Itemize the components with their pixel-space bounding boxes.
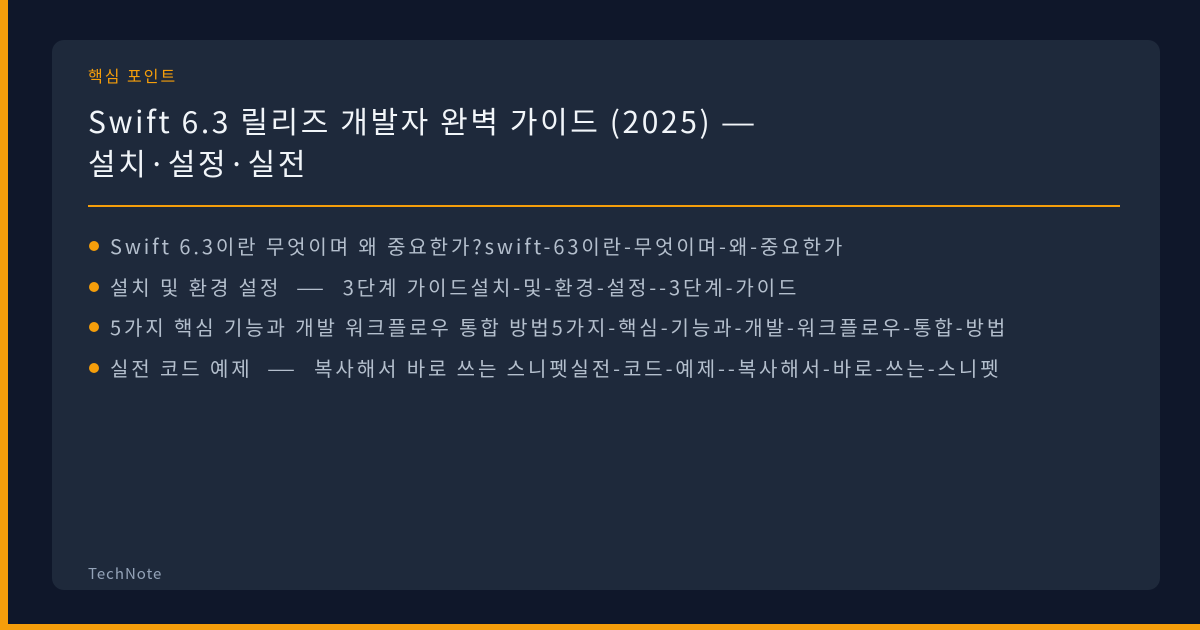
title bbox=[88, 98, 758, 184]
footer brand: TechNote bbox=[88, 563, 162, 584]
bullet 4: — bbox=[267, 352, 300, 382]
bullet 2: — bbox=[295, 272, 329, 300]
title: — bbox=[720, 98, 758, 142]
bullet 4: 실전 코드 예제 복사해서 바로 쓰는 스니펫실전-코드-예제--복사해서-바로-쓰는-스니펫 bbox=[110, 352, 1002, 382]
title: Swift 6.3 릴리즈 개발자 완벽 가이드 (2025) bbox=[88, 98, 712, 142]
bullet 2: 설치 및 환경 설정 3단계 가이드설치-및-환경-설정--3단계-가이드 bbox=[110, 272, 799, 300]
kicker label: 핵심 포인트 bbox=[88, 63, 177, 87]
title: 설치·설정·실전 bbox=[88, 140, 308, 184]
bullet 3: 5가지 핵심 기능과 개발 워크플로우 통합 방법5가지-핵심-기능과-개발-워크플로우-통합-방법 bbox=[110, 312, 1008, 341]
bullet 1: Swift 6.3이란 무엇이며 왜 중요한가?swift-63이란-무엇이며-왜-중요한가 bbox=[110, 231, 845, 260]
bullet list bbox=[89, 231, 1008, 382]
